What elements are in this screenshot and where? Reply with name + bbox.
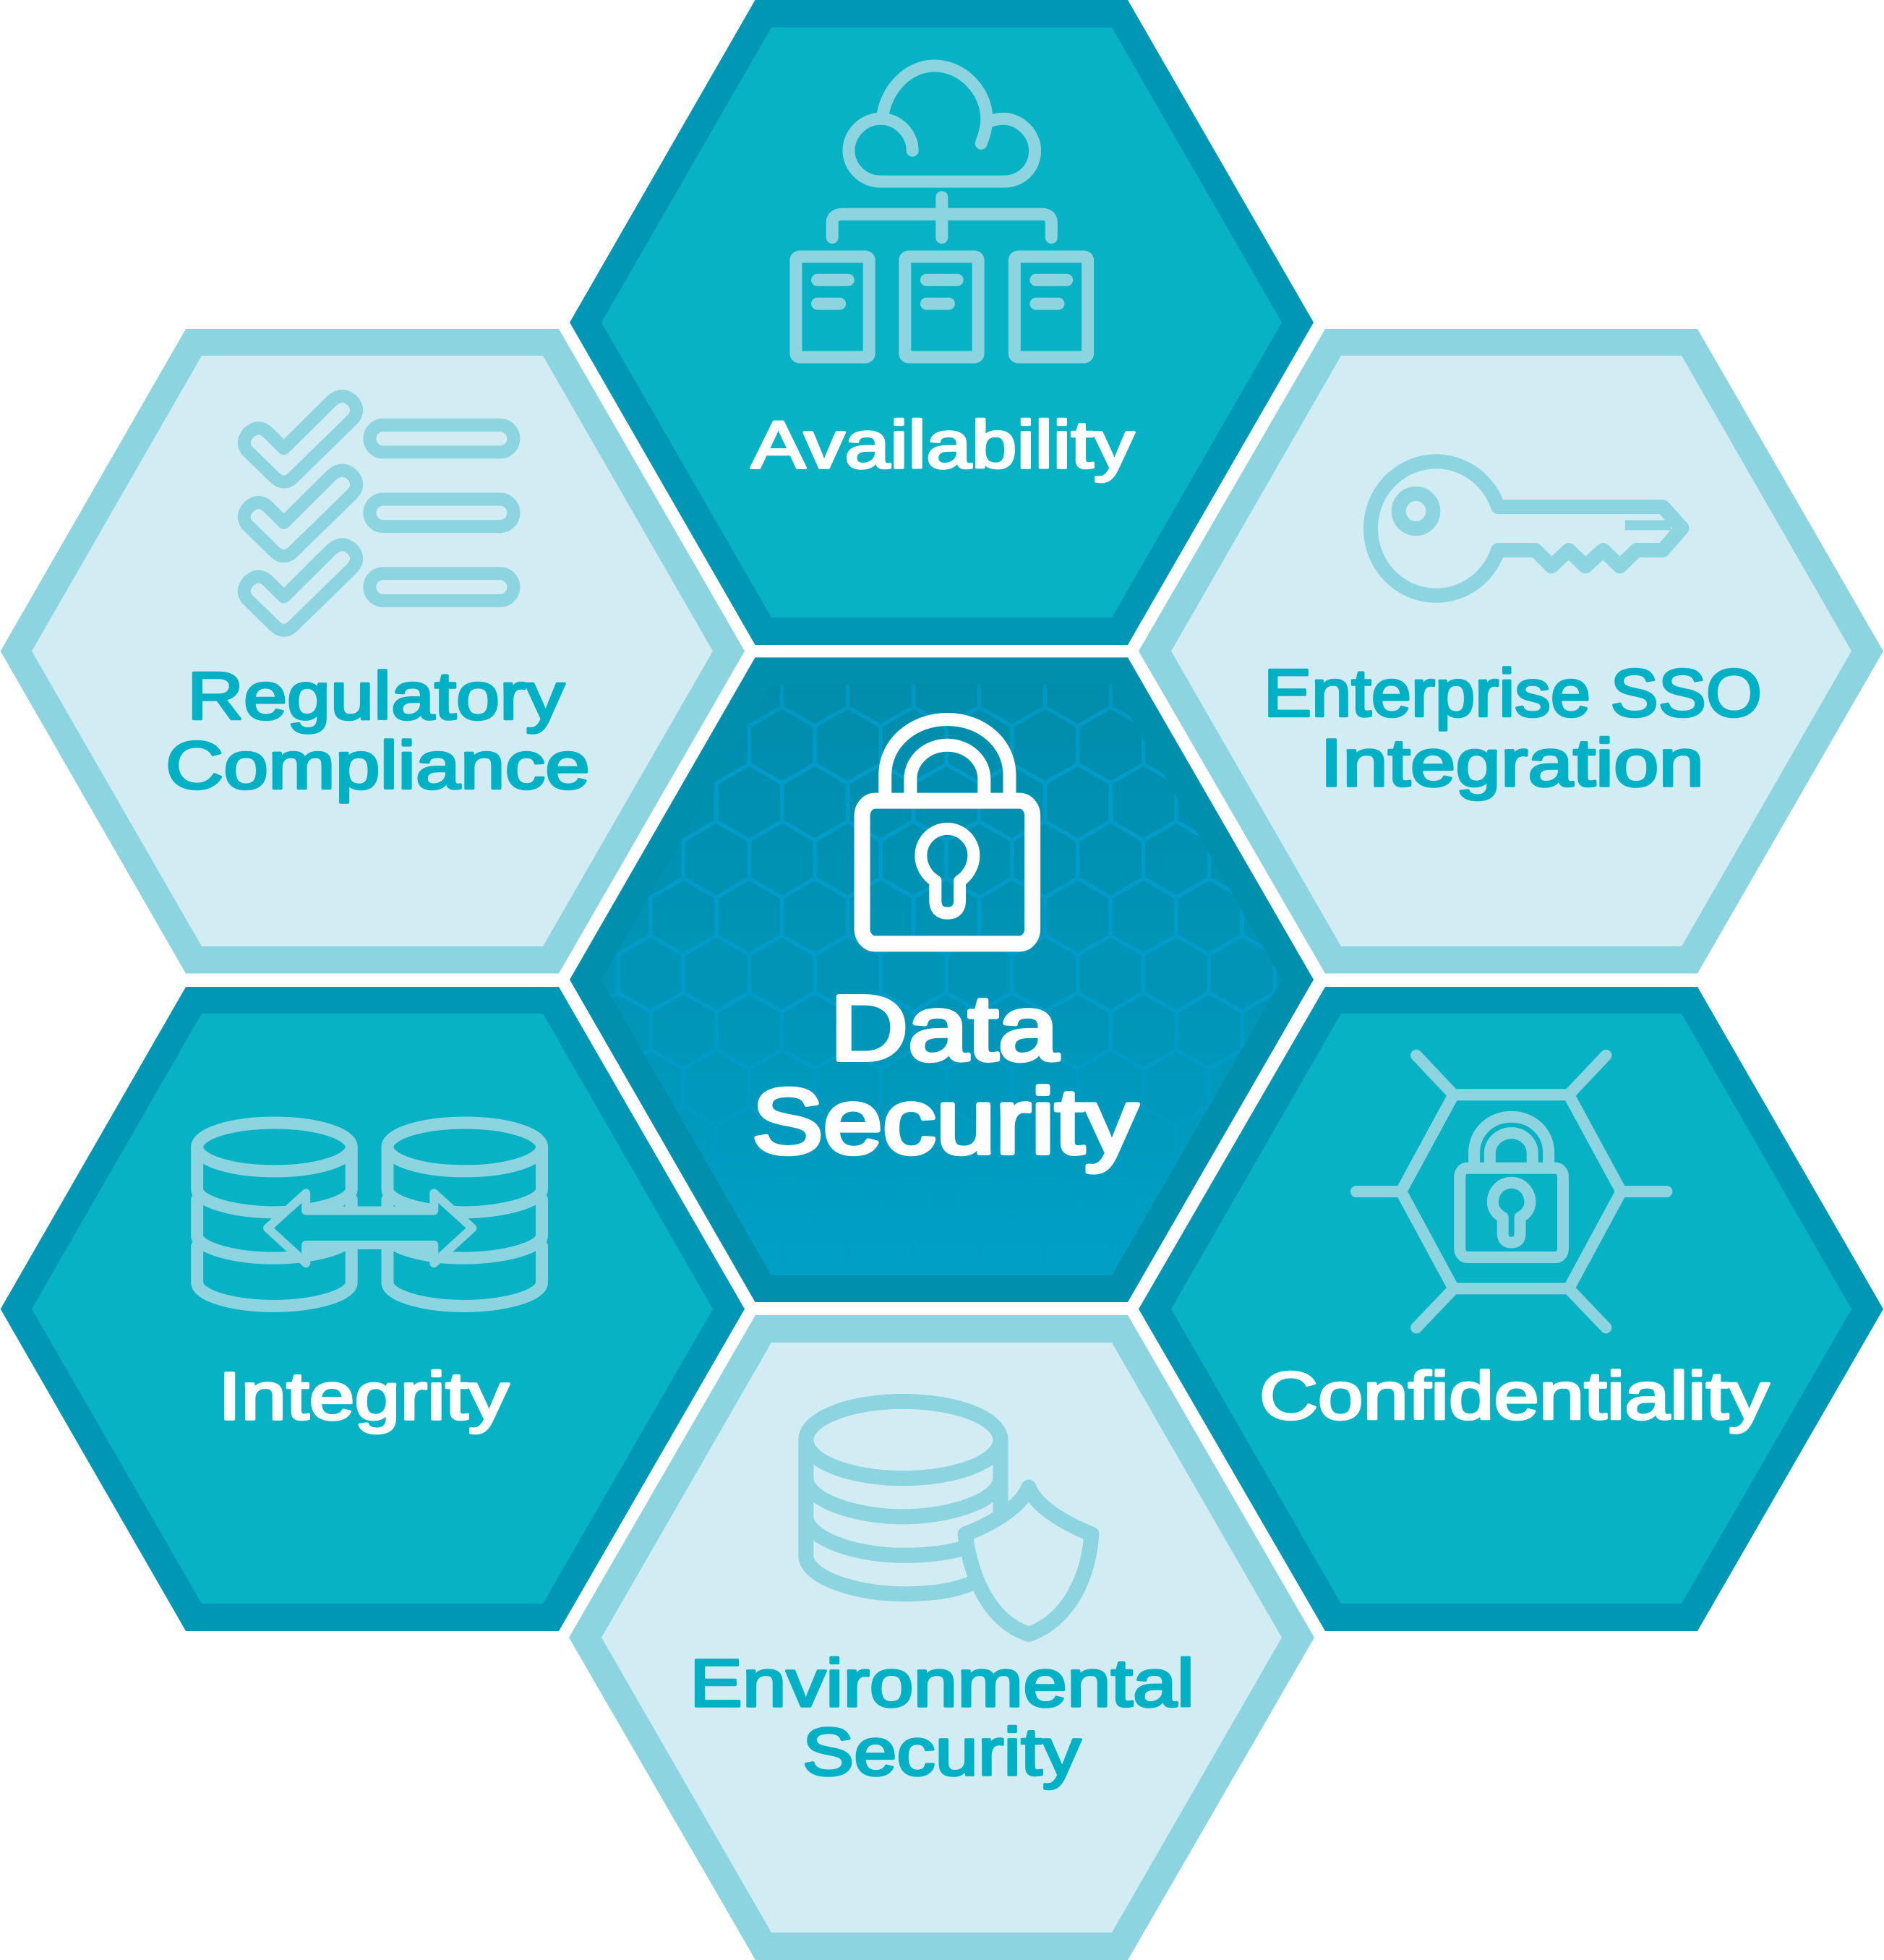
label: Data Security	[752, 977, 1138, 1173]
label: Enterprise SSO Integration: Enterprise SSO	[1264, 655, 1762, 730]
label: Regulatory Compliance: Regulatory	[187, 658, 565, 733]
icon: two databases with double arrow	[197, 1123, 542, 1306]
icon: database with shield	[806, 1401, 1092, 1634]
panel: environmental security	[569, 1315, 1314, 1960]
icon: lock in network hexagon	[1356, 1056, 1666, 1327]
label: Environmental Security: Security	[802, 1714, 1082, 1789]
label: Regulatory Compliance	[166, 658, 590, 803]
panel: data security (center)	[570, 657, 1314, 1302]
icon: cloud network with servers	[796, 66, 1088, 357]
label: Availability: Availability	[751, 407, 1135, 482]
label: Enterprise SSO Integration: Integration	[1320, 725, 1704, 800]
icon: key	[1371, 461, 1682, 596]
label: Regulatory Compliance: Compliance	[166, 728, 590, 803]
panel: enterprise SSO integration	[1139, 329, 1883, 973]
label: Environmental Security	[690, 1646, 1194, 1789]
panel: availability	[570, 0, 1314, 645]
icon: checklist	[244, 396, 513, 630]
label: Environmental Security: Environmental	[690, 1646, 1194, 1721]
icon: padlock	[862, 719, 1032, 943]
label: Data Security: Security	[752, 1070, 1138, 1173]
honeycomb texture	[610, 685, 1277, 1107]
panel: confidentiality	[1139, 987, 1883, 1631]
label: Enterprise SSO Integration	[1264, 655, 1762, 800]
label: Data Security: Data	[830, 977, 1059, 1080]
panel: regulatory compliance	[1, 329, 745, 973]
panel: integrity	[1, 987, 745, 1631]
label: Integrity: Integrity	[218, 1358, 510, 1434]
label: Confidentiality: Confidentiality	[1259, 1358, 1770, 1433]
